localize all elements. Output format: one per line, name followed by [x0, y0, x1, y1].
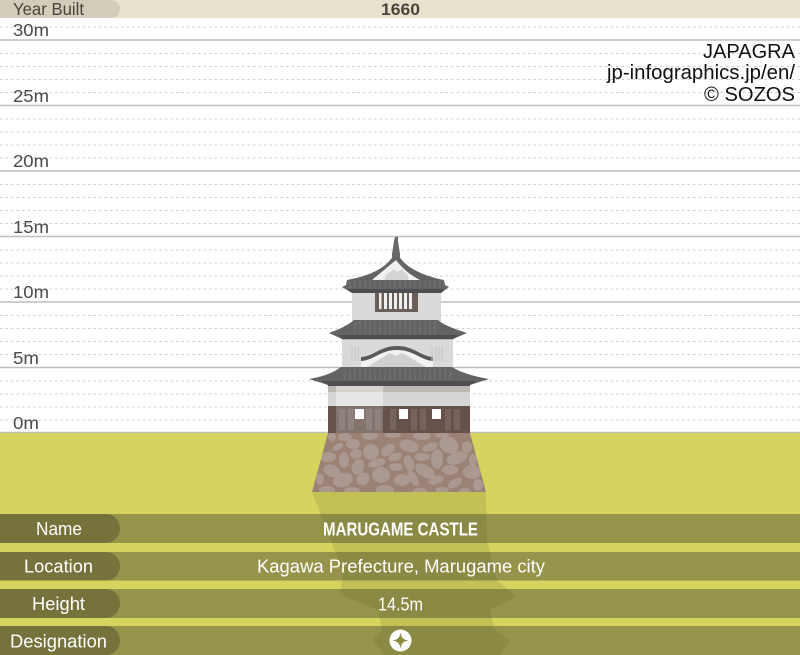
top roof: [342, 237, 449, 293]
height scale labels: 30m: [13, 20, 49, 40]
credit: [606, 41, 796, 106]
credit: JAPAGRA: [703, 41, 796, 63]
upper wall with window: [352, 290, 441, 322]
year built row: 1660: [381, 0, 420, 19]
info row: name: MARUGAME CASTLE: [323, 520, 478, 540]
height scale labels: 5m: [13, 348, 39, 368]
info row: height: Height: [32, 593, 85, 614]
height scale labels: 0m: [13, 413, 39, 433]
height scale labels: 20m: [13, 151, 49, 171]
info row: height: 14.5m: [378, 594, 423, 614]
year built row: [0, 0, 800, 19]
info row: location: Kagawa Prefecture, Marugame city: [257, 556, 546, 576]
stone base: [312, 432, 486, 495]
info row: designation: Designation: [10, 630, 107, 652]
info row: location: Location: [24, 556, 93, 576]
bottom roof: [309, 367, 489, 386]
castle shadow: [312, 492, 516, 655]
icon: designation mark: [390, 630, 412, 652]
info row: height: [32, 593, 423, 614]
castle: [309, 237, 489, 495]
middle roof: [329, 320, 467, 339]
lower storey brown panel: [328, 406, 470, 433]
height scale labels: [13, 20, 49, 433]
ground: [0, 433, 800, 655]
credit: jp-infographics.jp/en/: [606, 62, 795, 84]
middle wall: [342, 336, 453, 369]
info row: location: [24, 556, 546, 576]
info row: designation: [10, 630, 412, 652]
height scale labels: 15m: [13, 217, 49, 237]
info row: name: Name: [36, 518, 82, 539]
info row: name: [36, 518, 478, 540]
height scale labels: 25m: [13, 86, 49, 106]
credit: © SOZOS: [704, 84, 795, 106]
height scale labels: 10m: [13, 282, 49, 302]
info row backgrounds: [0, 514, 800, 655]
lower wall: [328, 384, 470, 406]
